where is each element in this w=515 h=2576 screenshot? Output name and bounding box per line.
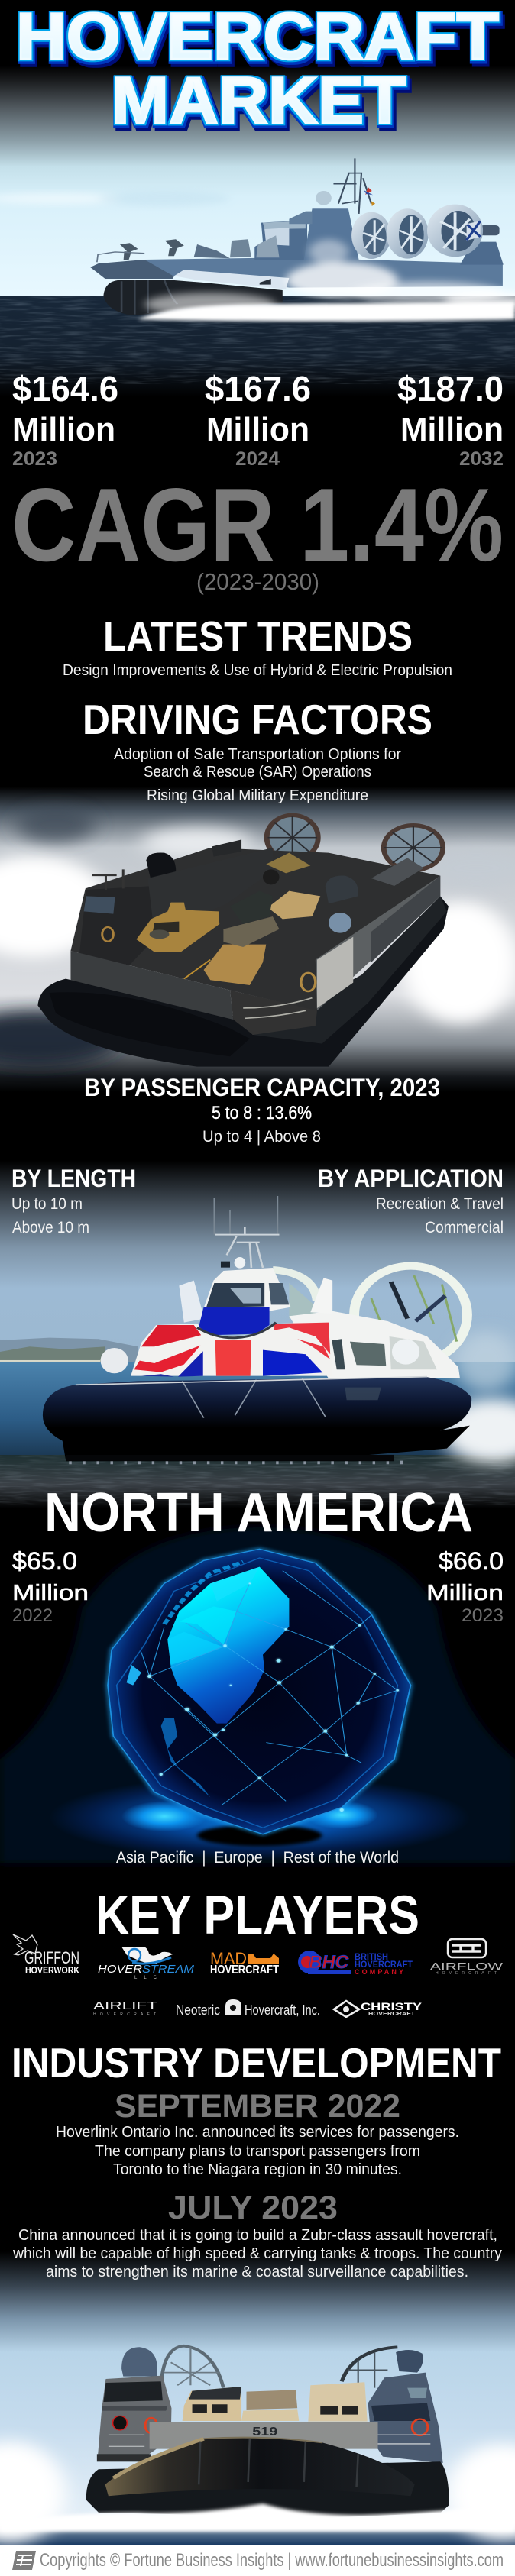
text: driving factors list: Search & Rescue (SAR) Operations: [144, 764, 371, 781]
logo: Hoverstream: HOVER STREAM: [98, 1963, 195, 1976]
vehicles: [136, 903, 219, 952]
logo: Airlift Hovercraft: HOVERCRAFT: [93, 2012, 156, 2017]
text: driving factors list: Rising Global Military Expenditure: [147, 787, 368, 804]
spray: [0, 2503, 515, 2532]
stat: 2032 market size: Million: [400, 411, 504, 448]
cabin: [203, 1268, 291, 1311]
logo: British Hovercraft Company: HOVERCRAFT: [355, 1959, 413, 1970]
flag panel: [131, 1322, 332, 1376]
stat: 2024 market size: 2024: [235, 448, 280, 470]
text: July 2023 heading: JULY 2023: [168, 2190, 338, 2226]
logo: MAD Hovercraft: HOVERCRAFT: [210, 1964, 279, 1976]
logo: MAD Hovercraft: MAD: [210, 1949, 247, 1968]
stat: North America 2023: Million: [426, 1581, 504, 1605]
logo: Airflow Hovercraft: HOVERCRAFT: [436, 1971, 497, 1976]
icon: Fortune Business Insights logo: [12, 2551, 36, 2570]
stat: 2023 market size: Million: [12, 411, 115, 448]
panel: by length: BY LENGTH: [11, 1165, 136, 1192]
stat: 2023 market size: [12, 369, 118, 470]
panel: hero image with hovercraft: [0, 0, 515, 399]
logo: British Hovercraft Company: COMPANY: [355, 1968, 403, 1976]
logo: Airlift Hovercraft: AIRLIFT: [93, 1999, 157, 2012]
left long structure: [148, 848, 273, 934]
vehicles: [183, 2387, 241, 2421]
text: September 2022 development: [56, 2123, 459, 2178]
panel: bottom hovercraft image: [0, 2184, 515, 2545]
heading: September 2022: SEPTEMBER 2022: [115, 2088, 400, 2125]
text: September 2022 development: Toronto to the Niagara region in 30 minutes.: [113, 2161, 402, 2178]
stat: 2023 market size: 2023: [12, 448, 57, 470]
panel: by passenger capacity: 5 to 8 : 13.6%: [212, 1103, 312, 1123]
bow wall: [150, 2422, 377, 2449]
windshield blue panel: [199, 1307, 270, 1335]
logo: Griffon Hoverwork: HOVERWORK: [25, 1964, 79, 1976]
text: July 2023 development: aims to strengthen its marine & coastal surveillance capabilities.: [46, 2263, 468, 2280]
text: other regions: Asia Pacific | Europe | Rest of the World: [116, 1849, 399, 1867]
stat: North America 2022: 2022: [12, 1605, 53, 1626]
stat: North America 2022: [12, 1547, 89, 1626]
panel: by length: [11, 1165, 136, 1236]
panel: by application: [318, 1165, 504, 1236]
stat: 2032 market size: 2032: [459, 448, 504, 470]
stat: North America 2023: [426, 1547, 504, 1626]
panel: by application: Commercial: [425, 1219, 504, 1236]
fan left: [267, 815, 318, 860]
logo: Airlift Hovercraft: [93, 1999, 157, 2017]
panel: by length: Up to 10 m: [11, 1195, 83, 1213]
stat: North America 2023: 2023: [462, 1605, 504, 1626]
text: July 2023 development: China announced that it is going to build a Zubr-class assault hovercraft,: [18, 2226, 497, 2244]
text: latest trends detail: Design Improvements & Use of Hybrid & Electric Propulsion: [63, 662, 452, 679]
panel: by length: Above 10 m: [12, 1219, 89, 1236]
logo: British Hovercraft Company: BRITISH: [355, 1951, 388, 1962]
right side wall: [316, 876, 440, 1010]
panel: by application: Recreation & Travel: [376, 1195, 504, 1213]
text: July 2023 development: which will be capable of high speed & carrying tanks & troops. The country: [12, 2245, 503, 2262]
logo: Griffon Hoverwork: [13, 1934, 79, 1976]
heading: latest trends: LATEST TRENDS: [103, 612, 413, 660]
logo: Griffon Hoverwork: GRIFFON: [24, 1948, 79, 1967]
domes: [121, 2347, 157, 2377]
rear superstructure: [289, 1311, 460, 1378]
stat: 2023 market size: $164.6: [12, 369, 118, 409]
logo: British Hovercraft Company: [298, 1951, 413, 1976]
stat: 2024 market size: $167.6: [205, 369, 311, 409]
panel: by passenger capacity: [84, 1074, 440, 1146]
heading: HOVERCRAFT MARKET title: [16, 0, 499, 137]
heading: key players: KEY PLAYERS: [96, 1886, 419, 1946]
logo: British Hovercraft Company: BHC: [309, 1952, 349, 1973]
stat: North America 2022: Million: [12, 1581, 89, 1605]
stat: 2032 market size: [397, 369, 504, 470]
stat: CAGR: (2023-2030): [196, 568, 319, 595]
lifeboat: [101, 1348, 128, 1373]
stat: North America 2022: $65.0: [12, 1547, 77, 1575]
stat: 2024 market size: [205, 369, 311, 470]
logo: Christy Hovercraft: HOVERCRAFT: [368, 2012, 416, 2017]
panel: LCAC hovercraft image: [0, 787, 515, 1092]
logo: Airflow Hovercraft: AIRFLOW: [430, 1960, 504, 1972]
heading: North America: NORTH AMERICA: [44, 1482, 473, 1543]
right tower: [368, 2373, 443, 2463]
stat: North America 2023: $66.0: [439, 1547, 504, 1575]
panel: by passenger capacity: BY PASSENGER CAPACITY, 2023: [84, 1074, 440, 1101]
panel: bottom hovercraft image: 519: [252, 2425, 277, 2438]
heading: HOVERCRAFT MARKET title: HOVERCRAFT: [16, 0, 499, 73]
panel: UK flag hovercraft image: [0, 1161, 515, 1508]
heading: HOVERCRAFT MARKET title: MARKET: [112, 64, 406, 137]
logo: Neoteric Hovercraft: Hovercraft, Inc.: [245, 2002, 320, 2018]
text: September 2022 development: Hoverlink Ontario Inc. announced its services for passengers.: [56, 2123, 459, 2141]
panel: by passenger capacity: Up to 4 | Above 8: [202, 1128, 321, 1146]
logo: Hoverstream: [98, 1947, 195, 1980]
front walls: [70, 951, 233, 1020]
logo: Hoverstream: LLC: [134, 1976, 157, 1980]
text: driving factors list: [114, 746, 401, 804]
logo: MAD Hovercraft: [210, 1949, 279, 1976]
chart: glowing globe: [0, 1527, 515, 1863]
logo: Neoteric Hovercraft: [176, 1999, 320, 2018]
fan right: [384, 826, 443, 870]
text: July 2023 development: [12, 2226, 503, 2280]
stat: 2024 market size: Million: [206, 411, 309, 448]
left tower: [98, 2376, 171, 2455]
cabin: [79, 886, 161, 965]
logo: Christy Hovercraft: [334, 2000, 423, 2017]
footer: copyright bar: [0, 2545, 515, 2576]
fans: [161, 2346, 223, 2388]
logo: Airflow Hovercraft: [430, 1939, 504, 1976]
skirt: [43, 1377, 471, 1460]
text: driving factors list: Adoption of Safe Transportation Options for: [114, 746, 401, 763]
hull: [37, 896, 449, 1067]
mast: [214, 1196, 280, 1268]
stat: 2032 market size: $187.0: [397, 369, 504, 409]
skirt: [86, 2461, 449, 2518]
logo: Christy Hovercraft: CHRISTY: [361, 2000, 423, 2012]
heading: driving factors: DRIVING FACTORS: [83, 696, 432, 743]
big fan: [355, 1266, 467, 1364]
logo: Neoteric Hovercraft: Neoteric: [176, 2002, 220, 2018]
text: September 2022 development: The company plans to transport passengers from: [95, 2142, 420, 2160]
